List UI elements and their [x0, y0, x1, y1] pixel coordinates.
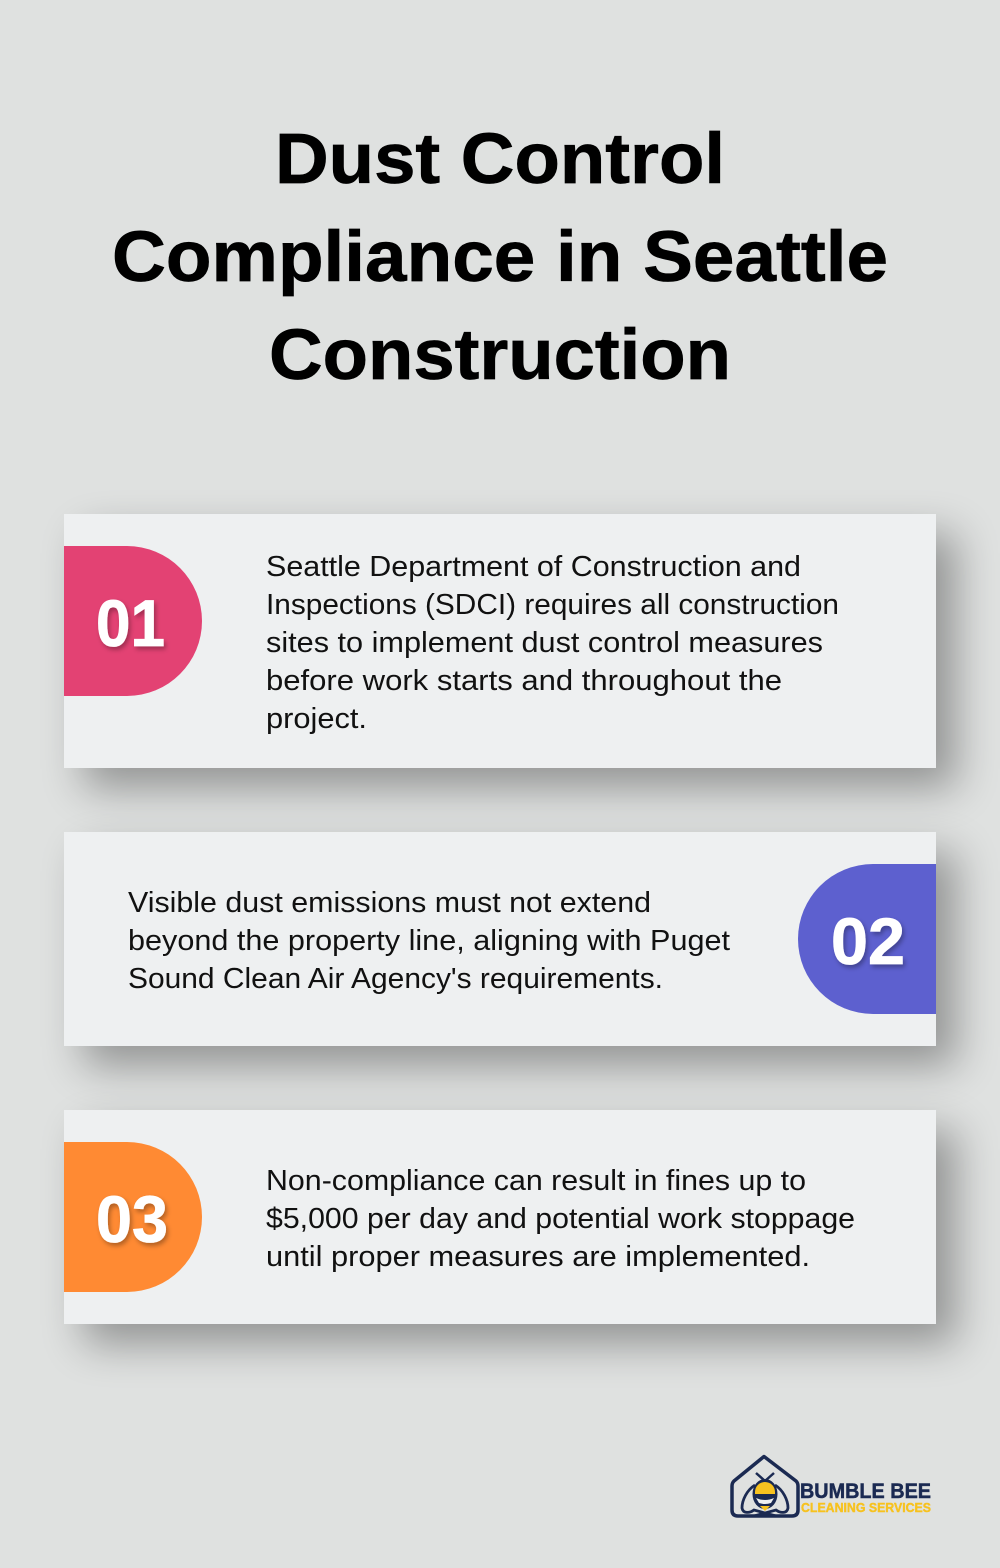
- panel: step 03: [64, 1110, 956, 1344]
- text: step 03: until proper measures are implemented.: [266, 1241, 810, 1273]
- text: step 02: [128, 887, 730, 995]
- title: Construction: [269, 316, 731, 395]
- text: step 03: $5,000 per day and potential work stoppage: [266, 1203, 855, 1235]
- badge 01: 01: [96, 586, 165, 660]
- logo: Bumble Bee Cleaning Services: [732, 1456, 931, 1516]
- text: step 01: before work starts and throughout the: [266, 665, 782, 697]
- text: step 02: Visible dust emissions must not extend: [128, 887, 651, 919]
- text: step 03: Non-compliance can result in fines up to: [266, 1165, 806, 1197]
- title: [112, 120, 888, 395]
- icon: bee in house: [732, 1456, 798, 1516]
- text: step 02: Sound Clean Air Agency's requirements.: [128, 963, 663, 995]
- logo wordmark: BUMBLE BEE: [800, 1480, 931, 1503]
- text: step 03: [266, 1165, 855, 1273]
- text: step 01: project.: [266, 703, 367, 735]
- panel: step 01: [64, 514, 956, 788]
- badge 03: [64, 1142, 202, 1292]
- title: Dust Control: [275, 120, 725, 199]
- title: Compliance in Seattle: [112, 218, 888, 297]
- text: step 01: sites to implement dust control measures: [266, 627, 823, 659]
- badge 02: [798, 864, 936, 1014]
- badge 01: [64, 546, 202, 696]
- text: step 01: Seattle Department of Construction and: [266, 551, 801, 583]
- badge 02: 02: [831, 904, 905, 978]
- text: step 01: [266, 551, 839, 735]
- logo tagline: CLEANING SERVICES: [801, 1501, 931, 1515]
- text: step 02: beyond the property line, aligning with Puget: [128, 925, 730, 957]
- badge 03: 03: [96, 1182, 168, 1256]
- panel: step 02: [64, 832, 956, 1066]
- text: step 01: Inspections (SDCI) requires all construction: [266, 589, 839, 621]
